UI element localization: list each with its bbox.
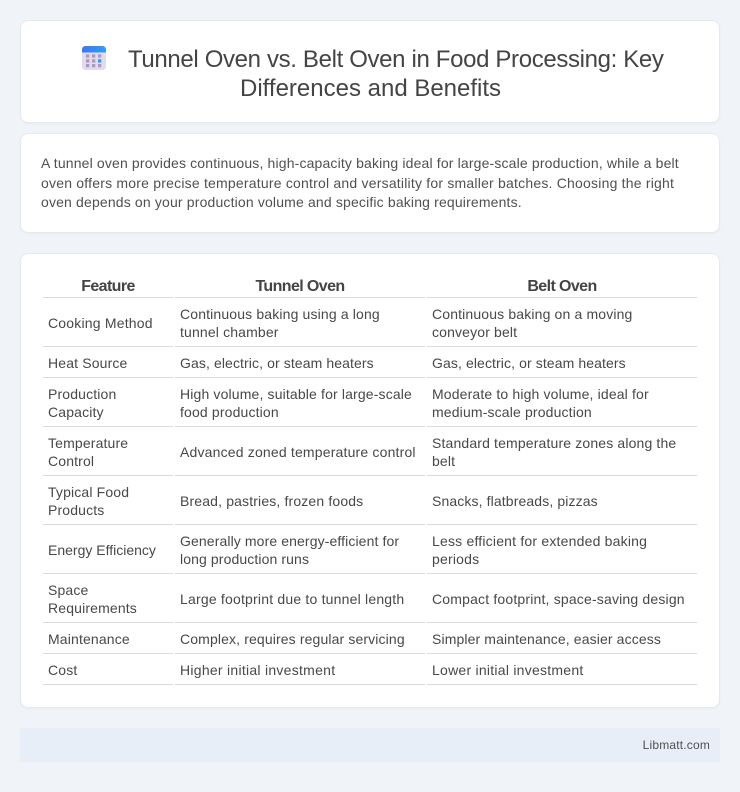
row: maintenance [43, 631, 697, 654]
row: temperature control: Control [48, 453, 94, 469]
heading: page title: Tunnel Oven vs. Belt Oven in Food Processing: Key [128, 46, 664, 73]
table header row: Tunnel Oven [255, 278, 345, 295]
heading: page title: Differences and Benefits [240, 75, 501, 102]
row: cost: Cost [48, 662, 77, 678]
row: energy efficiency: long production runs [180, 551, 309, 567]
row: typical food products: Bread, pastries, frozen foods [180, 493, 363, 509]
row: typical food products: Products [48, 502, 104, 518]
row: cooking method: Continuous baking on a moving [432, 306, 632, 322]
panel: comparison table [20, 253, 720, 708]
text block: introduction paragraph: oven depends on your production volume and specific baking requirements. [41, 194, 522, 210]
row: production capacity: food production [180, 404, 279, 420]
text block: introduction paragraph [41, 155, 679, 210]
row: typical food products [43, 484, 697, 525]
table header row [43, 278, 697, 298]
row: temperature control: Temperature [48, 435, 128, 451]
row: space requirements: Compact footprint, space-saving design [432, 591, 685, 607]
row: temperature control: Advanced zoned temperature control [180, 444, 416, 460]
row: production capacity: Moderate to high volume, ideal for [432, 386, 649, 402]
footer bar [20, 728, 720, 762]
row: space requirements [43, 582, 697, 623]
row: cooking method: Cooking Method [48, 315, 153, 331]
row: maintenance: Simpler maintenance, easier access [432, 631, 661, 647]
row: energy efficiency: Generally more energy-efficient for [180, 533, 399, 549]
table header row: Belt Oven [527, 278, 597, 295]
row: production capacity: Capacity [48, 404, 104, 420]
text block: introduction paragraph: A tunnel oven provides continuous, high-capacity baking ideal for large-scale production, while a belt [41, 155, 679, 171]
row: energy efficiency: Less efficient for extended baking [432, 533, 647, 549]
row: typical food products: Snacks, flatbreads, pizzas [432, 493, 598, 509]
row: cooking method: Continuous baking using a long [180, 306, 380, 322]
row: energy efficiency: periods [432, 551, 479, 567]
row: temperature control: Standard temperature zones along the [432, 435, 676, 451]
row: temperature control: belt [432, 453, 455, 469]
row: space requirements: Requirements [48, 600, 137, 616]
row: energy efficiency: Energy Efficiency [48, 542, 156, 558]
text block: introduction paragraph: oven offers more precise temperature control and versatility for smaller batches. Choosing the right [41, 175, 674, 191]
panel: title header [20, 20, 720, 123]
row: heat source: Gas, electric, or steam heaters [180, 355, 374, 371]
row: space requirements: Space [48, 582, 88, 598]
row: typical food products: Typical Food [48, 484, 129, 500]
row: cooking method: tunnel chamber [180, 324, 279, 340]
footer text: site credit: Libmatt.com [643, 738, 710, 752]
icon: calendar [82, 46, 106, 70]
row: maintenance: Complex, requires regular servicing [180, 631, 405, 647]
row: temperature control [43, 435, 697, 476]
row: production capacity: medium-scale production [432, 404, 592, 420]
row: heat source: Heat Source [48, 355, 127, 371]
row: production capacity: Production [48, 386, 116, 402]
row: production capacity: High volume, suitable for large-scale [180, 386, 412, 402]
row: heat source [43, 355, 697, 378]
row: production capacity [43, 386, 697, 427]
row: cost [43, 662, 697, 685]
row: cost: Lower initial investment [432, 662, 584, 678]
heading: page title [128, 46, 664, 102]
row: energy efficiency [43, 533, 697, 574]
row: maintenance: Maintenance [48, 631, 130, 647]
row: cooking method: conveyor belt [432, 324, 517, 340]
row: heat source: Gas, electric, or steam heaters [432, 355, 626, 371]
row: cooking method [43, 306, 697, 347]
row: cost: Higher initial investment [180, 662, 335, 678]
panel: introduction [20, 133, 720, 233]
table header row: Feature [81, 278, 135, 295]
row: space requirements: Large footprint due to tunnel length [180, 591, 404, 607]
